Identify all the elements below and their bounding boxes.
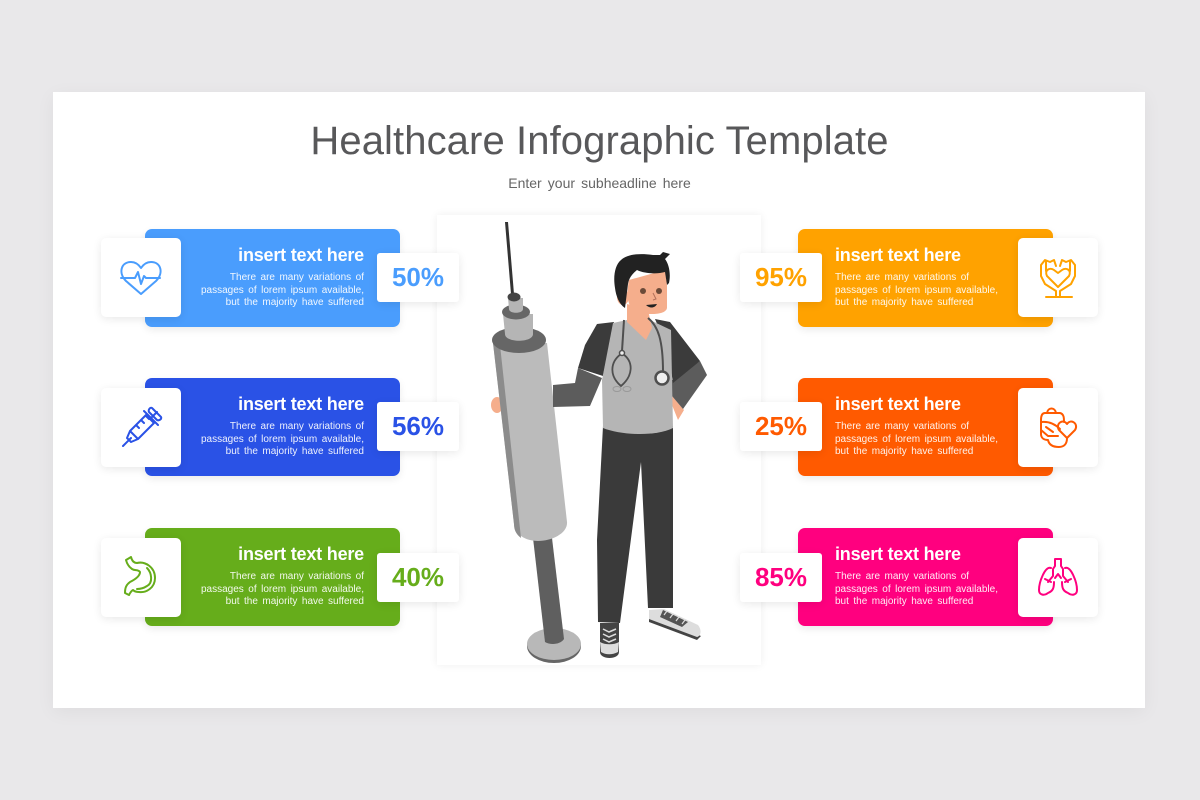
- icon: heart with pulse: [101, 238, 181, 317]
- icon: syringe: [101, 388, 181, 467]
- percentage 50%: [377, 253, 459, 302]
- orange card text: but the majority have suffered: [835, 446, 973, 457]
- left shoe: [600, 623, 619, 658]
- right arm: [672, 361, 707, 409]
- percentage 95%: [740, 253, 822, 302]
- orange card text: There are many variations of: [835, 421, 969, 432]
- icon: hands holding heart: [1018, 238, 1098, 317]
- panel: green stomach 40%: [100, 528, 460, 630]
- icon: head with mask and heart: [1018, 388, 1098, 467]
- icon: stomach: [101, 538, 181, 617]
- amber card text: There are many variations of: [835, 272, 969, 283]
- pink card text: insert text here: [835, 544, 961, 564]
- dark blue card text: insert text here: [238, 394, 364, 414]
- green card text: insert text here: [238, 544, 364, 564]
- pink card text: [798, 528, 1053, 626]
- icon: lungs: [1018, 538, 1098, 617]
- dark blue card text: passages of lorem ipsum available,: [201, 434, 364, 444]
- percentage 25%: [740, 402, 822, 451]
- eyes, nose and mouth: [640, 288, 662, 308]
- amber card text: insert text here: [835, 245, 961, 265]
- orange card text: insert text here: [835, 394, 961, 414]
- left arm: [553, 368, 602, 407]
- panel: pink lungs 85%: [738, 528, 1100, 630]
- center panel: [437, 215, 761, 665]
- percentage 95%: 95%: [755, 262, 807, 292]
- percentage 56%: 56%: [392, 411, 444, 441]
- ear: [617, 289, 629, 305]
- blue card text: insert text here: [238, 245, 364, 265]
- stethoscope: [612, 318, 668, 392]
- blue card text: but the majority have suffered: [226, 297, 364, 308]
- neck: [627, 304, 652, 340]
- percentage 40%: 40%: [392, 562, 444, 592]
- trousers: [597, 426, 673, 623]
- slide panel: [53, 92, 1145, 708]
- percentage 50%: 50%: [392, 262, 444, 292]
- pink card text: but the majority have suffered: [835, 596, 973, 607]
- panel: dark blue syringe 56%: [100, 378, 460, 480]
- percentage 25%: 25%: [755, 411, 807, 441]
- dark blue card text: but the majority have suffered: [226, 446, 364, 457]
- hair: [614, 252, 670, 308]
- percentage 85%: 85%: [755, 562, 807, 592]
- green card text: but the majority have suffered: [226, 596, 364, 607]
- shirt: [602, 320, 673, 434]
- amber card text: but the majority have suffered: [835, 297, 973, 308]
- amber card text: [798, 229, 1053, 327]
- panel: blue heart 50%: [100, 229, 460, 330]
- hand on hip: [672, 396, 684, 420]
- panel: amber hands 95%: [738, 229, 1100, 330]
- dark blue card text: [145, 378, 400, 476]
- pink card text: There are many variations of: [835, 571, 969, 582]
- face: [628, 270, 667, 314]
- right shoe: [649, 609, 701, 640]
- doctor figure: [553, 252, 707, 658]
- title: Healthcare Infographic Template: [310, 119, 889, 163]
- percentage 56%: [377, 402, 459, 451]
- green card text: There are many variations of: [230, 571, 364, 582]
- panel: orange mask 25%: [738, 378, 1100, 480]
- pink card text: passages of lorem ipsum available,: [835, 584, 998, 594]
- percentage 85%: [740, 553, 822, 602]
- giant syringe: [492, 222, 581, 663]
- hand behind syringe: [491, 397, 503, 413]
- orange card text: passages of lorem ipsum available,: [835, 434, 998, 444]
- subtitle: Enter your subheadline here: [508, 175, 691, 191]
- blue card text: passages of lorem ipsum available,: [201, 284, 364, 296]
- blue card text: There are many variations of: [230, 272, 364, 283]
- blue card text: [145, 229, 400, 327]
- amber card text: passages of lorem ipsum available,: [835, 284, 998, 296]
- green card text: passages of lorem ipsum available,: [201, 584, 364, 594]
- dark blue card text: There are many variations of: [230, 421, 364, 432]
- percentage 40%: [377, 553, 459, 602]
- orange card text: [798, 378, 1053, 476]
- green card text: [145, 528, 400, 626]
